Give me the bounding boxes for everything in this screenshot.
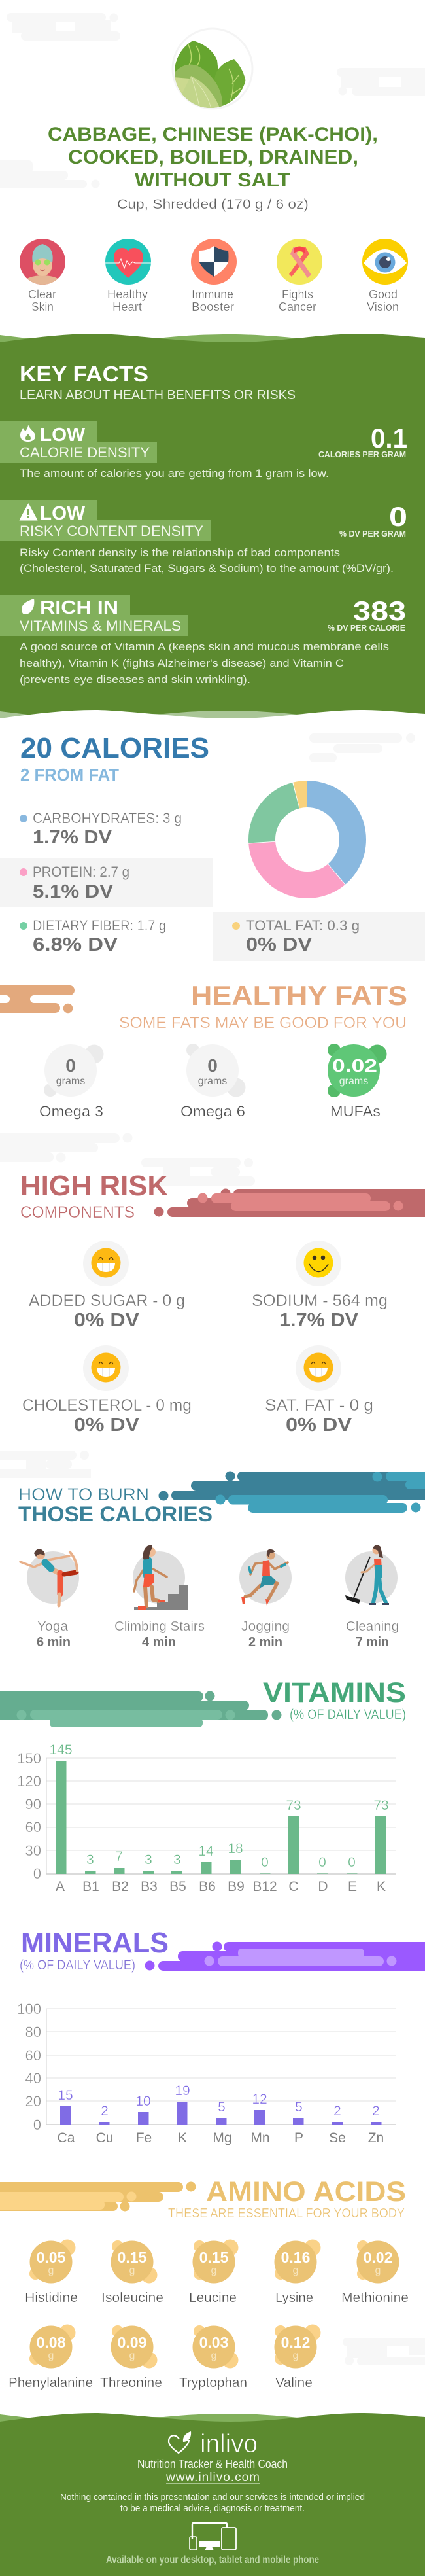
heading: minerals [20,1927,169,1973]
fact: low risky content density: RISKY CONTENT DENSITY [20,523,203,539]
bar chart: minerals: 19 [175,2083,190,2098]
amino: histidine: 0.05 [37,2249,66,2266]
icon: eye [362,239,408,285]
bar chart: vitamins: 60 [26,1819,41,1835]
icon: leaf [22,599,34,614]
amino: lysine [275,2239,320,2305]
macro: total fat: 0% DV [246,934,313,955]
bar chart: vitamins: B3 [141,1879,158,1894]
fact: low risky content density: 0 [389,501,407,532]
banner: amino acids [0,2181,196,2212]
amino: histidine [25,2239,78,2305]
bar chart: vitamins: K [377,1879,386,1894]
bar chart: minerals: 2 [101,2104,109,2119]
fact: rich in vitamins and minerals: healthy), Vitamin K (fights Alzheimer's disease) and Vitamin C [20,658,344,669]
bar chart: minerals: K [178,2130,187,2145]
amino: phenylalanine: 0.08 [37,2334,66,2351]
bar chart: vitamins: 0 [33,1865,41,1882]
title: WITHOUT SALT [135,169,290,191]
fact: low risky content density: Risky Content density is the relationship of bad components [20,547,340,559]
amino: valine: g [293,2350,298,2361]
heading: how to burn [18,1485,212,1526]
amino: leucine: g [211,2265,216,2276]
component: sodium [252,1241,388,1331]
heading: calories: 2 FROM FAT [20,765,119,785]
heading: healthy fats: HEALTHY FATS [191,980,407,1011]
bar chart: minerals: 5 [295,2100,303,2115]
activity: yoga: Yoga [37,1619,69,1634]
fact: rich in vitamins and minerals: % DV PER CALORIE [328,623,405,633]
bar chart: vitamins: C [288,1879,299,1894]
icon: clear skin [20,239,65,285]
amino: phenylalanine [8,2324,93,2390]
footer website: www.inlivo.com [165,2471,260,2484]
activity: jogging [239,1549,292,1650]
bar chart: minerals [17,2001,396,2145]
bar chart: minerals: Cu [96,2130,113,2145]
activity: climbing stairs: 4 min [142,1635,176,1650]
title [48,124,378,191]
icon: cabbage photo in circle [173,29,252,109]
bar chart: vitamins: E [348,1879,357,1894]
heading: amino acids: THESE ARE ESSENTIAL FOR YOUR BODY [168,2206,405,2221]
fat: omega 6: 0 [207,1055,218,1076]
amino: isoleucine: Isoleucine [101,2291,163,2305]
amino: leucine: Leucine [189,2291,237,2305]
component: cholesterol [22,1345,192,1436]
banner: vitamins [0,1691,281,1727]
bar chart: vitamins: B9 [228,1879,245,1894]
activity: climbing stairs [114,1545,205,1650]
fact: low calorie density [0,421,407,480]
bar chart: minerals: 10 [135,2094,151,2109]
bar chart: minerals: Ca [58,2130,75,2145]
logo: inlivo [169,2429,258,2458]
footer tagline: Nutrition Tracker & Health Coach [137,2458,288,2471]
bar chart: minerals: 2 [333,2104,341,2119]
activity: jogging: Jogging [241,1619,290,1634]
fat: omega 3: Omega 3 [39,1103,103,1120]
banner: high risk [154,1188,425,1217]
disclaimer [60,2492,365,2514]
icon: shield [191,239,237,285]
activity: yoga: 6 min [37,1635,71,1650]
bar chart: vitamins: A [56,1879,65,1894]
component: cholesterol: CHOLESTEROL - 0 mg [22,1396,192,1415]
component: added sugar: ADDED SUGAR - 0 g [29,1292,185,1310]
amino: phenylalanine: g [48,2350,54,2361]
panel: health benefits [20,239,408,313]
component: added sugar [29,1241,185,1331]
bar chart: minerals: 2 [372,2104,380,2119]
heading: vitamins: (% OF DAILY VALUE) [290,1707,406,1722]
fact: low calorie density: The amount of calories you are getting from 1 gram is low. [20,468,329,480]
bar chart: vitamins: 30 [26,1843,41,1859]
bar chart: vitamins: 3 [86,1852,94,1867]
amino: threonine [100,2325,162,2390]
amino: methionine [341,2240,409,2305]
bar chart: minerals: 100 [17,2001,41,2017]
bar chart: vitamins [17,1742,396,1894]
heading: calories [20,732,209,785]
heading: amino acids [168,2176,406,2221]
fat: omega 3: grams [56,1076,85,1087]
fact: rich in vitamins and minerals: RICH IN [40,597,118,618]
heading: minerals: MINERALS [21,1927,169,1959]
bar chart: vitamins: 3 [144,1852,152,1867]
heading: calories: 20 CALORIES [20,732,209,764]
heading: high risk: HIGH RISK [20,1170,168,1202]
benefit labels: Cancer [279,300,316,313]
benefit labels: Heart [112,300,142,313]
amino: leucine [189,2239,238,2305]
panel: footer [0,2413,425,2576]
heading: high risk: COMPONENTS [20,1203,135,1222]
bar chart: vitamins: B6 [199,1879,216,1894]
amino: isoleucine: g [129,2265,135,2276]
bar chart: minerals: 20 [26,2093,41,2109]
amino: tryptophan: Tryptophan [179,2376,247,2390]
bar chart: vitamins: 0 [261,1855,269,1870]
benefit labels: Skin [31,300,54,313]
activity: cleaning: Cleaning [346,1619,399,1634]
fact: rich in vitamins and minerals: (prevents eye diseases and skin wrinkling). [20,674,250,686]
icon: ribbon [277,239,322,285]
bar chart: vitamins: 73 [373,1798,389,1813]
fact: low calorie density: CALORIES PER GRAM [318,450,406,459]
bar chart: vitamins: 150 [17,1750,41,1767]
disclaimer: Nothing contained in this presentation and our services is intended or implied [60,2492,365,2503]
fat: mufas [328,1044,387,1120]
title: COOKED, BOILED, DRAINED, [68,147,358,168]
component: saturated fat: 0% DV [286,1415,352,1436]
bar chart: minerals: 40 [26,2070,41,2087]
bar chart: vitamins: 73 [286,1798,301,1813]
activity: yoga [20,1549,79,1650]
amino: histidine: Histidine [25,2291,78,2305]
fact: low calorie density: CALORIE DENSITY [20,444,150,461]
bar chart: vitamins: 3 [173,1852,181,1867]
activity: cleaning: 7 min [356,1635,389,1650]
amino: methionine: Methionine [341,2291,409,2305]
icon: devices [190,2523,236,2550]
benefit labels: Good [369,288,398,301]
heading: key facts: KEY FACTS [20,362,148,386]
bar chart: minerals: 60 [26,2047,41,2064]
heading: amino acids: AMINO ACIDS [206,2176,406,2208]
component: saturated fat [265,1345,373,1436]
amino: tryptophan: 0.03 [199,2334,228,2351]
activity: cleaning [345,1545,399,1650]
amino: threonine: g [129,2350,135,2361]
amino: methionine: g [375,2265,381,2276]
fat: omega 6: Omega 6 [180,1103,245,1120]
logo: inlivo: inlivo [200,2429,258,2458]
bar chart: minerals: 15 [58,2088,73,2103]
bar chart: minerals: 80 [26,2024,41,2040]
heading: how to burn: THOSE CALORIES [18,1502,212,1526]
heading: vitamins: VITAMINS [263,1677,406,1708]
availability note: Available on your desktop, tablet and mobile phone [106,2554,319,2566]
fact: rich in vitamins and minerals: A good source of Vitamin A (keeps skin and mucous membrane cells [20,641,389,653]
amino: threonine: 0.09 [118,2334,146,2351]
bar chart: vitamins: 7 [115,1849,123,1864]
icon: flame [20,425,35,442]
amino: lysine: Lysine [275,2291,313,2305]
amino: isoleucine: 0.15 [118,2249,147,2266]
fat: omega 3 [39,1044,103,1120]
fat: mufas: grams [339,1076,368,1087]
bar chart: minerals: Zn [368,2130,384,2145]
benefit labels: Vision [367,300,399,313]
bar chart: minerals: Se [329,2130,346,2145]
macro: carbohydrates [20,810,182,848]
amino: valine [275,2324,320,2390]
fact: low risky content density: % DV PER GRAM [339,529,406,538]
fact: low risky content density: LOW [40,503,86,524]
bar chart: vitamins: B2 [112,1879,129,1894]
bar chart: vitamins: 145 [49,1742,73,1757]
fat: omega 6 [180,1044,246,1120]
macro: protein: PROTEIN: 2.7 g [33,864,129,880]
fact: rich in vitamins and minerals: 383 [353,595,406,626]
panel: key facts [0,334,425,725]
macro: dietary fiber [20,917,166,955]
macro: dietary fiber: 6.8% DV [33,934,118,955]
fat: omega 3: 0 [65,1055,76,1076]
heading: minerals: (% OF DAILY VALUE) [20,1958,135,1973]
activity: climbing stairs: Climbing Stairs [114,1619,205,1634]
bar chart: vitamins: D [318,1879,328,1894]
heading: how to burn: HOW TO BURN [18,1485,149,1504]
bar chart: vitamins: 18 [228,1841,243,1856]
component: sodium: SODIUM - 564 mg [252,1292,388,1310]
heading: high risk [20,1170,168,1222]
banner: minerals [145,1942,425,1971]
activity: jogging: 2 min [248,1635,282,1650]
amino: threonine: Threonine [100,2376,162,2390]
fact: low calorie density: 0.1 [371,423,407,453]
macro: total fat [232,917,360,955]
bar chart: vitamins: 14 [198,1844,214,1859]
heading: vitamins [263,1677,406,1722]
amino: tryptophan: g [211,2350,216,2361]
benefit labels: Clear [28,288,56,301]
amino: lysine: g [293,2265,298,2276]
macro: carbohydrates: 1.7% DV [33,827,112,848]
icon: heart [105,239,151,285]
bar chart: vitamins: B12 [252,1879,277,1894]
fat: omega 6: grams [198,1076,227,1087]
macro: protein: 5.1% DV [33,881,114,902]
fat: mufas: 0.02 [332,1055,377,1076]
macro: carbohydrates: CARBOHYDRATES: 3 g [33,810,182,826]
amino: leucine: 0.15 [199,2249,229,2266]
benefit labels: Fights [282,288,313,301]
amino: valine: 0.12 [281,2334,310,2351]
benefit labels [28,288,399,313]
bar chart: vitamins: 0 [348,1855,356,1870]
bar chart: minerals: Mg [212,2130,232,2145]
component: cholesterol: 0% DV [74,1415,140,1436]
macro: total fat: TOTAL FAT: 0.3 g [246,917,360,934]
disclaimer: to be a medical advice, diagnosis or treatment. [120,2503,305,2514]
heading: healthy fats [119,980,407,1032]
bar chart: vitamins: 120 [17,1773,41,1790]
bar chart: vitamins: 90 [26,1796,41,1812]
fact: low calorie density: LOW [40,425,86,446]
title: CABBAGE, CHINESE (PAK-CHOI), [48,124,378,145]
benefit labels: Booster [192,300,234,313]
fact: low risky content density: (Cholesterol, Saturated Fat, Sugars & Sodium) to the amount (%DV/gr). [20,563,394,574]
donut chart [262,794,353,885]
amino: valine: Valine [275,2376,313,2390]
bar chart: minerals: 5 [218,2100,226,2115]
amino: histidine: g [48,2265,54,2276]
benefit labels: Immune [192,288,233,301]
bar chart: vitamins: B5 [169,1879,186,1894]
bar chart: minerals: P [294,2130,303,2145]
amino: phenylalanine: Phenylalanine [8,2376,93,2390]
component: saturated fat: SAT. FAT - 0 g [265,1396,373,1415]
amino: isoleucine [101,2240,163,2305]
bar chart: minerals: Fe [136,2130,152,2145]
bar chart: vitamins: 0 [318,1855,326,1870]
component: sodium: 1.7% DV [279,1310,359,1331]
amino: lysine: 0.16 [281,2249,310,2266]
banner: healthy fats [0,985,82,1013]
icon: warning triangle [20,504,37,520]
amino: tryptophan [179,2325,247,2390]
macro: dietary fiber: DIETARY FIBER: 1.7 g [33,917,166,934]
component: added sugar: 0% DV [74,1310,140,1331]
serving size: Cup, Shredded (170 g / 6 oz) [117,197,309,212]
macro: protein [20,864,129,902]
heading: key facts: LEARN ABOUT HEALTH BENEFITS OR RISKS [20,388,296,402]
bar chart: minerals: 12 [252,2092,267,2107]
heading: healthy fats: SOME FATS MAY BE GOOD FOR YOU [119,1014,407,1032]
fact: low risky content density [0,500,407,574]
fact: rich in vitamins and minerals: VITAMINS & MINERALS [20,618,181,634]
bar chart: minerals: Mn [250,2130,270,2145]
banner: burn calories [158,1471,425,1513]
heading: key facts [20,362,296,402]
amino: methionine: 0.02 [364,2249,392,2266]
fat: mufas: MUFAs [330,1103,381,1120]
bar chart: vitamins: B1 [82,1879,99,1894]
benefit labels: Healthy [107,288,148,301]
fact: rich in vitamins and minerals [0,595,406,686]
bar chart: minerals: 0 [33,2117,41,2133]
